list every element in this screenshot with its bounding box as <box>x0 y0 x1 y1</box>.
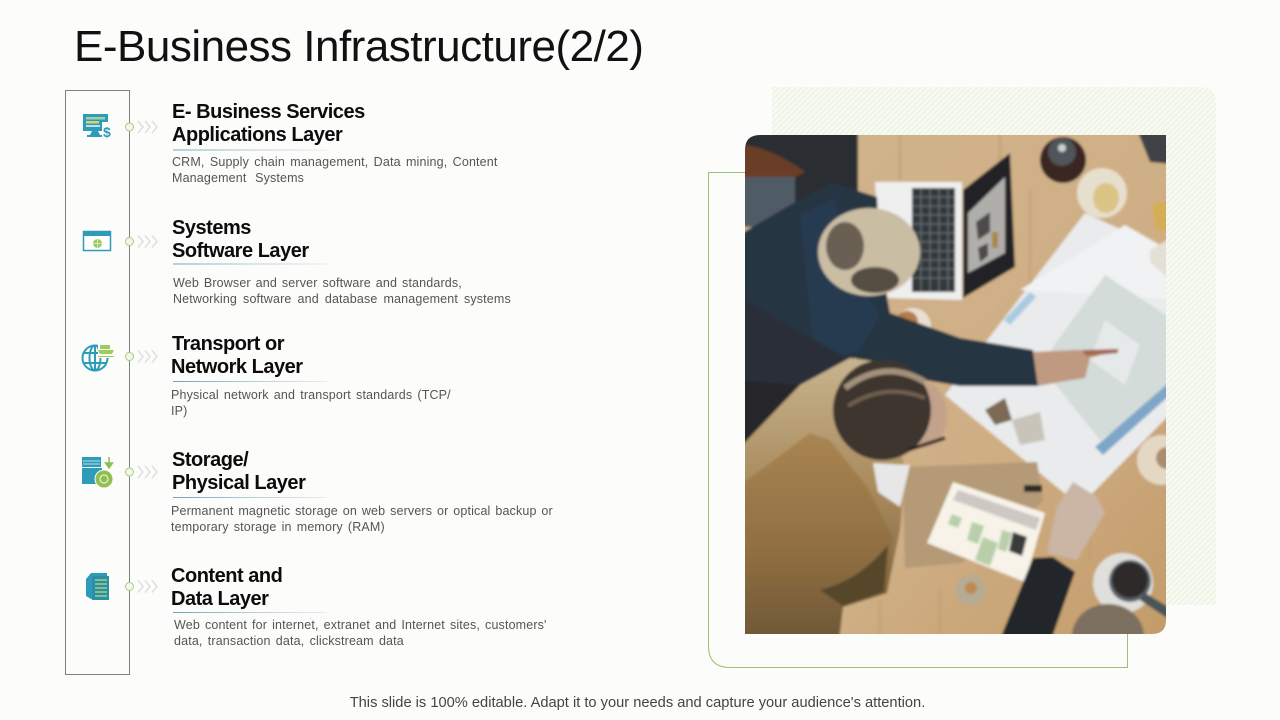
heading: Storage/ <box>172 449 249 471</box>
tablet <box>927 482 1045 582</box>
man head <box>918 384 946 444</box>
heading: Software Layer <box>172 240 309 262</box>
description: Networking software and database management systems <box>173 292 511 306</box>
icon: documents <box>86 573 109 600</box>
heading: Applications Layer <box>172 124 343 146</box>
folder <box>903 462 1043 568</box>
description: temporary storage in memory (RAM) <box>171 520 385 534</box>
description: IP) <box>171 404 187 418</box>
description: data, transaction data, clickstream data <box>174 634 404 648</box>
connector node and chevrons <box>126 466 157 478</box>
description: CRM, Supply chain management, Data mining, Content <box>172 155 498 169</box>
heading: Physical Layer <box>172 472 306 494</box>
heading: Data Layer <box>171 588 269 610</box>
divider <box>173 497 327 498</box>
panel: green photo outline <box>708 172 1128 668</box>
photo: team at table <box>745 135 1166 634</box>
connector node and chevrons <box>126 236 157 248</box>
heading: Systems <box>172 217 251 239</box>
divider <box>173 150 327 151</box>
title: E-Business Infrastructure(2/2) <box>74 22 643 71</box>
right saucer <box>1136 434 1166 486</box>
heading: Network Layer <box>171 356 303 378</box>
connector node and chevrons <box>126 350 157 362</box>
panel: icon rail <box>66 90 130 674</box>
collar <box>873 463 910 507</box>
heading: E- Business Services <box>172 101 365 123</box>
description: Web Browser and server software and standards, <box>173 276 462 290</box>
blueprints <box>945 213 1181 506</box>
third person hair <box>1070 602 1145 634</box>
divider <box>173 381 327 382</box>
divider <box>173 612 327 613</box>
icon: browser window <box>83 231 111 250</box>
icon: globe with ship <box>82 343 116 371</box>
sleeve <box>1000 556 1076 634</box>
person one: navy sweater <box>745 183 1040 388</box>
item 1: e-business services <box>83 101 498 185</box>
heading: Content and <box>171 565 282 587</box>
icon: monitor with dollar: $ <box>103 124 111 140</box>
item 2: systems software <box>83 217 511 306</box>
glass <box>956 575 986 605</box>
description: Permanent magnetic storage on web servers or optical backup or <box>171 504 553 518</box>
hand on table <box>1047 482 1105 560</box>
icon: storage with disc <box>82 457 113 488</box>
connector node and chevrons <box>126 121 157 133</box>
laptop <box>875 182 962 300</box>
coffee cup <box>1093 553 1153 613</box>
footer note: This slide is 100% editable. Adapt it to your needs and capture your audience's attention. <box>350 695 925 711</box>
hair <box>818 208 920 296</box>
item 5: content and data <box>86 565 547 648</box>
item 3: transport or network <box>82 333 451 418</box>
divider <box>173 264 327 265</box>
panel: hatched photo backdrop <box>772 87 1216 605</box>
connector node and chevrons <box>126 580 157 592</box>
description: Physical network and transport standards (TCP/ <box>171 388 451 402</box>
coffee cup near elbow <box>902 306 932 329</box>
icon: monitor with dollar <box>83 114 112 140</box>
heading: Transport or <box>172 333 285 355</box>
pointing hand <box>1032 348 1101 387</box>
person two: vest <box>745 356 904 590</box>
description: Web content for internet, extranet and Internet sites, customers' <box>174 618 547 632</box>
item 4: storage physical <box>82 449 553 534</box>
description: Management Systems <box>172 171 304 185</box>
bell and saucer <box>1040 137 1086 183</box>
